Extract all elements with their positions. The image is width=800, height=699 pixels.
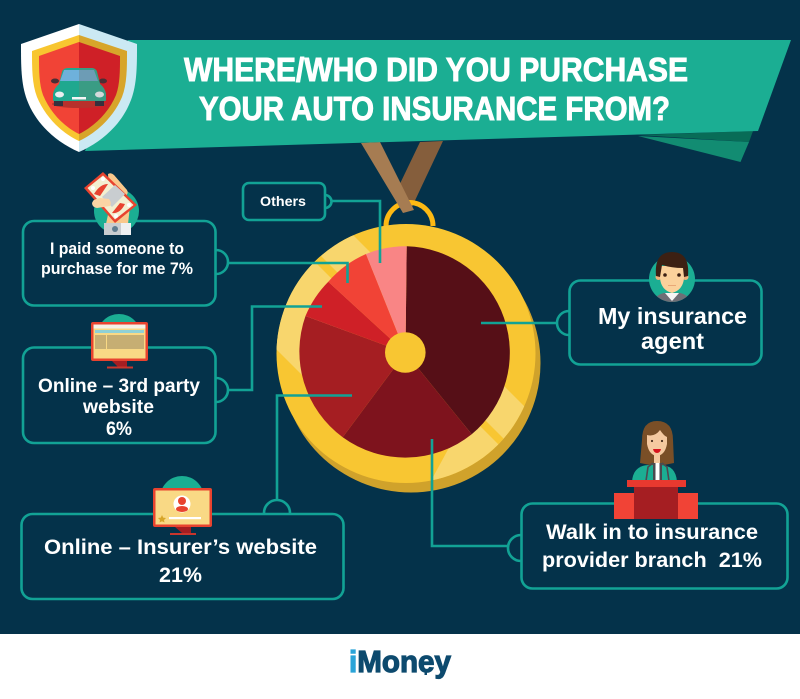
icon: hand with money [84, 172, 139, 235]
logo: iMoney: iMoney [349, 644, 452, 679]
callout: paid someone: purchase for me 7% [41, 260, 193, 278]
callout: online 3rd party website [23, 306, 322, 443]
callout: online insurer website: Online – Insurer’s website [44, 536, 317, 559]
callout: online 3rd party website: Online – 3rd party [38, 376, 200, 397]
callout: walk in to insurance provider branch [432, 421, 788, 588]
callout: paid someone: I paid someone to [50, 240, 184, 258]
callout: walk in to insurance provider branch: provider branch 21% [542, 549, 762, 572]
title text [184, 52, 688, 128]
callout: online insurer website [22, 396, 352, 599]
callout: my insurance agent: My insurance [598, 303, 747, 329]
callout: my insurance agent [481, 252, 762, 364]
medal [276, 224, 540, 492]
footer [0, 634, 800, 699]
icon: insurer monitor [153, 476, 212, 535]
title text: WHERE/WHO DID YOU PURCHASE [184, 52, 688, 89]
pie chart [299, 246, 510, 458]
callout: walk in to insurance provider branch: Walk in to insurance [546, 521, 758, 544]
icon: shield with car [21, 24, 137, 152]
title banner [85, 40, 791, 162]
callout: others [243, 183, 380, 263]
callout: online 3rd party website: 6% [106, 419, 132, 440]
title text: YOUR AUTO INSURANCE FROM? [199, 91, 670, 128]
icon: agent man [649, 252, 695, 303]
medal straps and ring [361, 141, 443, 226]
icon: woman at podium [614, 421, 698, 519]
callout: others: Others [260, 193, 306, 209]
callout: my insurance agent: agent [641, 328, 704, 354]
callout: online 3rd party website: website [82, 397, 154, 418]
icon: browser monitor [91, 314, 148, 368]
callout: online insurer website: 21% [159, 564, 202, 587]
callout: paid someone [23, 172, 348, 306]
